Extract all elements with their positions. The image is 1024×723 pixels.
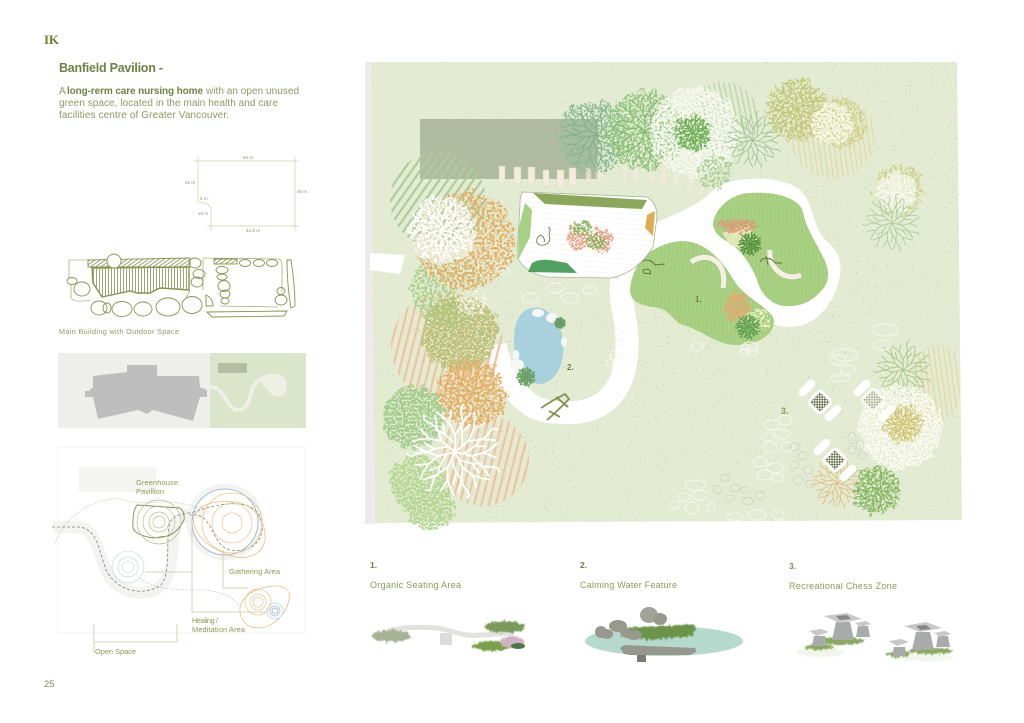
- plan: pebble clusters: [497, 266, 898, 521]
- feature 2 number: 2.: [580, 560, 587, 570]
- plan: seated figures: [640, 256, 782, 274]
- plan: pond: [510, 308, 567, 388]
- plan: lounge figure on path: [541, 394, 569, 420]
- plan: marker 1: 1.: [695, 295, 702, 304]
- plan: grey edge strip: [365, 62, 375, 524]
- site dimensions diagram: [185, 155, 307, 233]
- pavilion: central planting: [567, 221, 614, 253]
- heading: Banfield Pavilion -: [59, 61, 163, 75]
- plan: ground speckle: [365, 62, 965, 527]
- pond: plants: [515, 367, 537, 388]
- site dimensions diagram: 22 m: [185, 180, 195, 185]
- concept: water circles: [112, 551, 144, 583]
- plan: north-east tree group: [763, 78, 924, 254]
- concept: grey path band: [53, 508, 205, 593]
- concept labels: Gathering Area: [229, 567, 281, 576]
- feature 2 illustration: [585, 607, 743, 662]
- intro text block: facilities centre of Greater Vancouver.: [59, 110, 229, 121]
- plan: site ground: [371, 62, 962, 523]
- concept diagram: [52, 447, 305, 653]
- concept labels: Pavillion: [136, 487, 164, 496]
- site dimensions diagram: 10 m: [198, 211, 208, 216]
- feature 3 number: 3.: [789, 561, 796, 571]
- plan: stepping pavers: [499, 166, 707, 196]
- concept labels: Healing /: [192, 616, 219, 625]
- feature 1 illustration: [371, 621, 525, 651]
- concept: gathering circles: [192, 489, 265, 557]
- pavilion: right planter: [645, 211, 655, 236]
- intro text block: with an open unused: [205, 86, 299, 97]
- feature 3 illustration: [796, 613, 955, 661]
- concept labels: Meditation Area: [192, 625, 246, 634]
- figure-ground site plan: [58, 353, 306, 428]
- feature 1: organic seating area: [370, 560, 525, 651]
- plan: marker 2: 2.: [567, 363, 574, 372]
- plan: white entry path: [370, 253, 405, 274]
- pavilion: top planter: [533, 193, 647, 209]
- feature 3 title: Recreational Chess Zone: [789, 581, 897, 591]
- site dimensions diagram: 5 m: [200, 196, 208, 201]
- concept labels: Open Space: [95, 647, 136, 656]
- plan: lawn 1 planting: [724, 293, 772, 341]
- caption: main building: Main Building with Outdoor Space: [59, 327, 179, 336]
- plan: lawn 2 planting: [719, 219, 763, 257]
- feature 2: calming water feature: [580, 560, 743, 662]
- feature 1 title: Organic Seating Area: [370, 580, 461, 590]
- plan: south-east tree group: [810, 341, 942, 516]
- concept: dotted links: [55, 499, 240, 606]
- intro text block: A: [59, 86, 66, 97]
- plan: lawn 1: [630, 241, 774, 345]
- page number: 25: [44, 679, 55, 690]
- master plan: [365, 62, 965, 531]
- plan: white winding path: [495, 178, 840, 413]
- intro text block: green space, located in the main health and care: [59, 98, 278, 109]
- sketch: main building with outdoor space: [67, 254, 295, 317]
- plan: greenhouse pavilion: [517, 192, 657, 278]
- feature 3: recreational chess zone: [789, 561, 955, 661]
- plan: west tree group: [382, 190, 515, 531]
- pavilion: bottom planter: [528, 260, 577, 273]
- concept: leader lines: [94, 527, 267, 653]
- concept: healing area: [240, 586, 289, 628]
- concept labels: [95, 478, 281, 656]
- plan: existing building: [420, 119, 598, 179]
- logo: IK: IK: [44, 32, 60, 47]
- plan: lawn 2: [713, 193, 828, 306]
- site dimensions diagram: 54 m: [243, 155, 253, 160]
- intro text block: [59, 86, 299, 121]
- pavilion: seated figure icon: [537, 228, 550, 245]
- plan: curved benches on lawns: [691, 250, 801, 288]
- site dimensions diagram: 46 m: [297, 189, 307, 194]
- feature 2 title: Calming Water Feature: [580, 580, 677, 590]
- plan: chess tables: [797, 378, 897, 483]
- site dimensions diagram: 42.5 m: [246, 228, 260, 233]
- concept: dashed route: [52, 504, 262, 591]
- intro text block: long-rerm care nursing home: [67, 86, 203, 97]
- concept: grey ring: [189, 486, 261, 558]
- concept: pavilion shape: [133, 505, 184, 538]
- plan: hatch circles: [390, 82, 960, 506]
- feature 1 number: 1.: [370, 560, 377, 570]
- pond: rocks: [510, 309, 567, 371]
- plan: marker 3: 3.: [781, 406, 789, 416]
- plan: north tree group: [557, 87, 784, 189]
- concept labels: Greenhouse: [136, 478, 178, 487]
- pavilion: left planter: [518, 203, 532, 260]
